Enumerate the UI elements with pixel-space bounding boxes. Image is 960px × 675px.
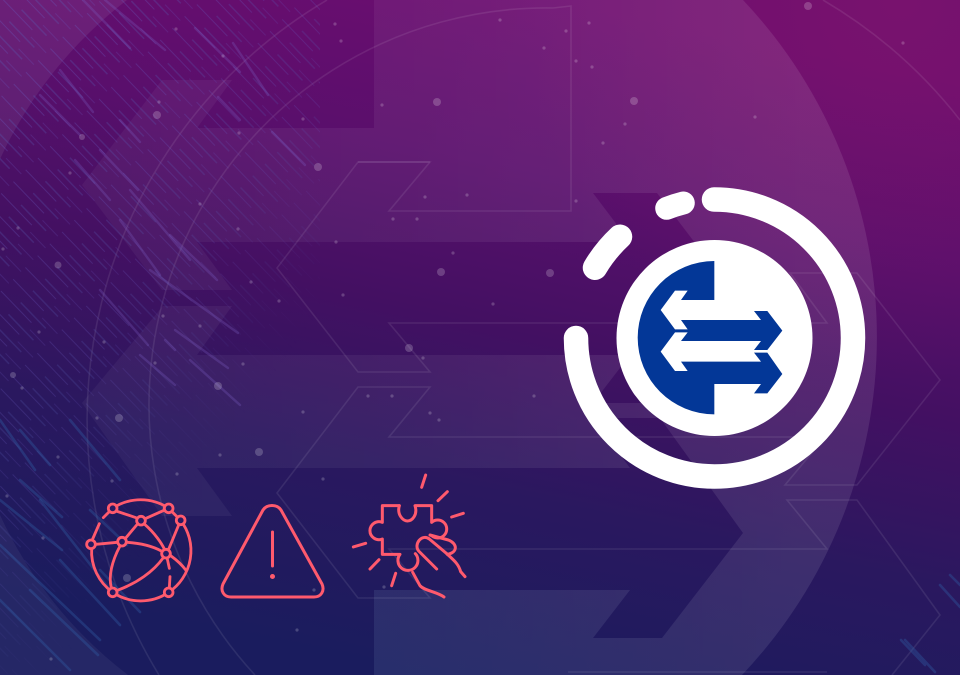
icon: puzzle piece in hand [353, 475, 465, 597]
logo: white disc [616, 240, 812, 436]
background: bottom-left corner [0, 515, 128, 675]
icon: warning triangle [222, 506, 323, 597]
ring: long dash [595, 237, 620, 268]
background: bottom lighter block [374, 590, 700, 675]
ring: short dash [667, 203, 683, 208]
logo: blue arrows mark [638, 261, 782, 414]
icon: network globe [87, 500, 191, 601]
emblem: white ring and logo [576, 199, 853, 476]
background: top-left corner [0, 0, 127, 159]
ring: main arc [576, 199, 853, 476]
